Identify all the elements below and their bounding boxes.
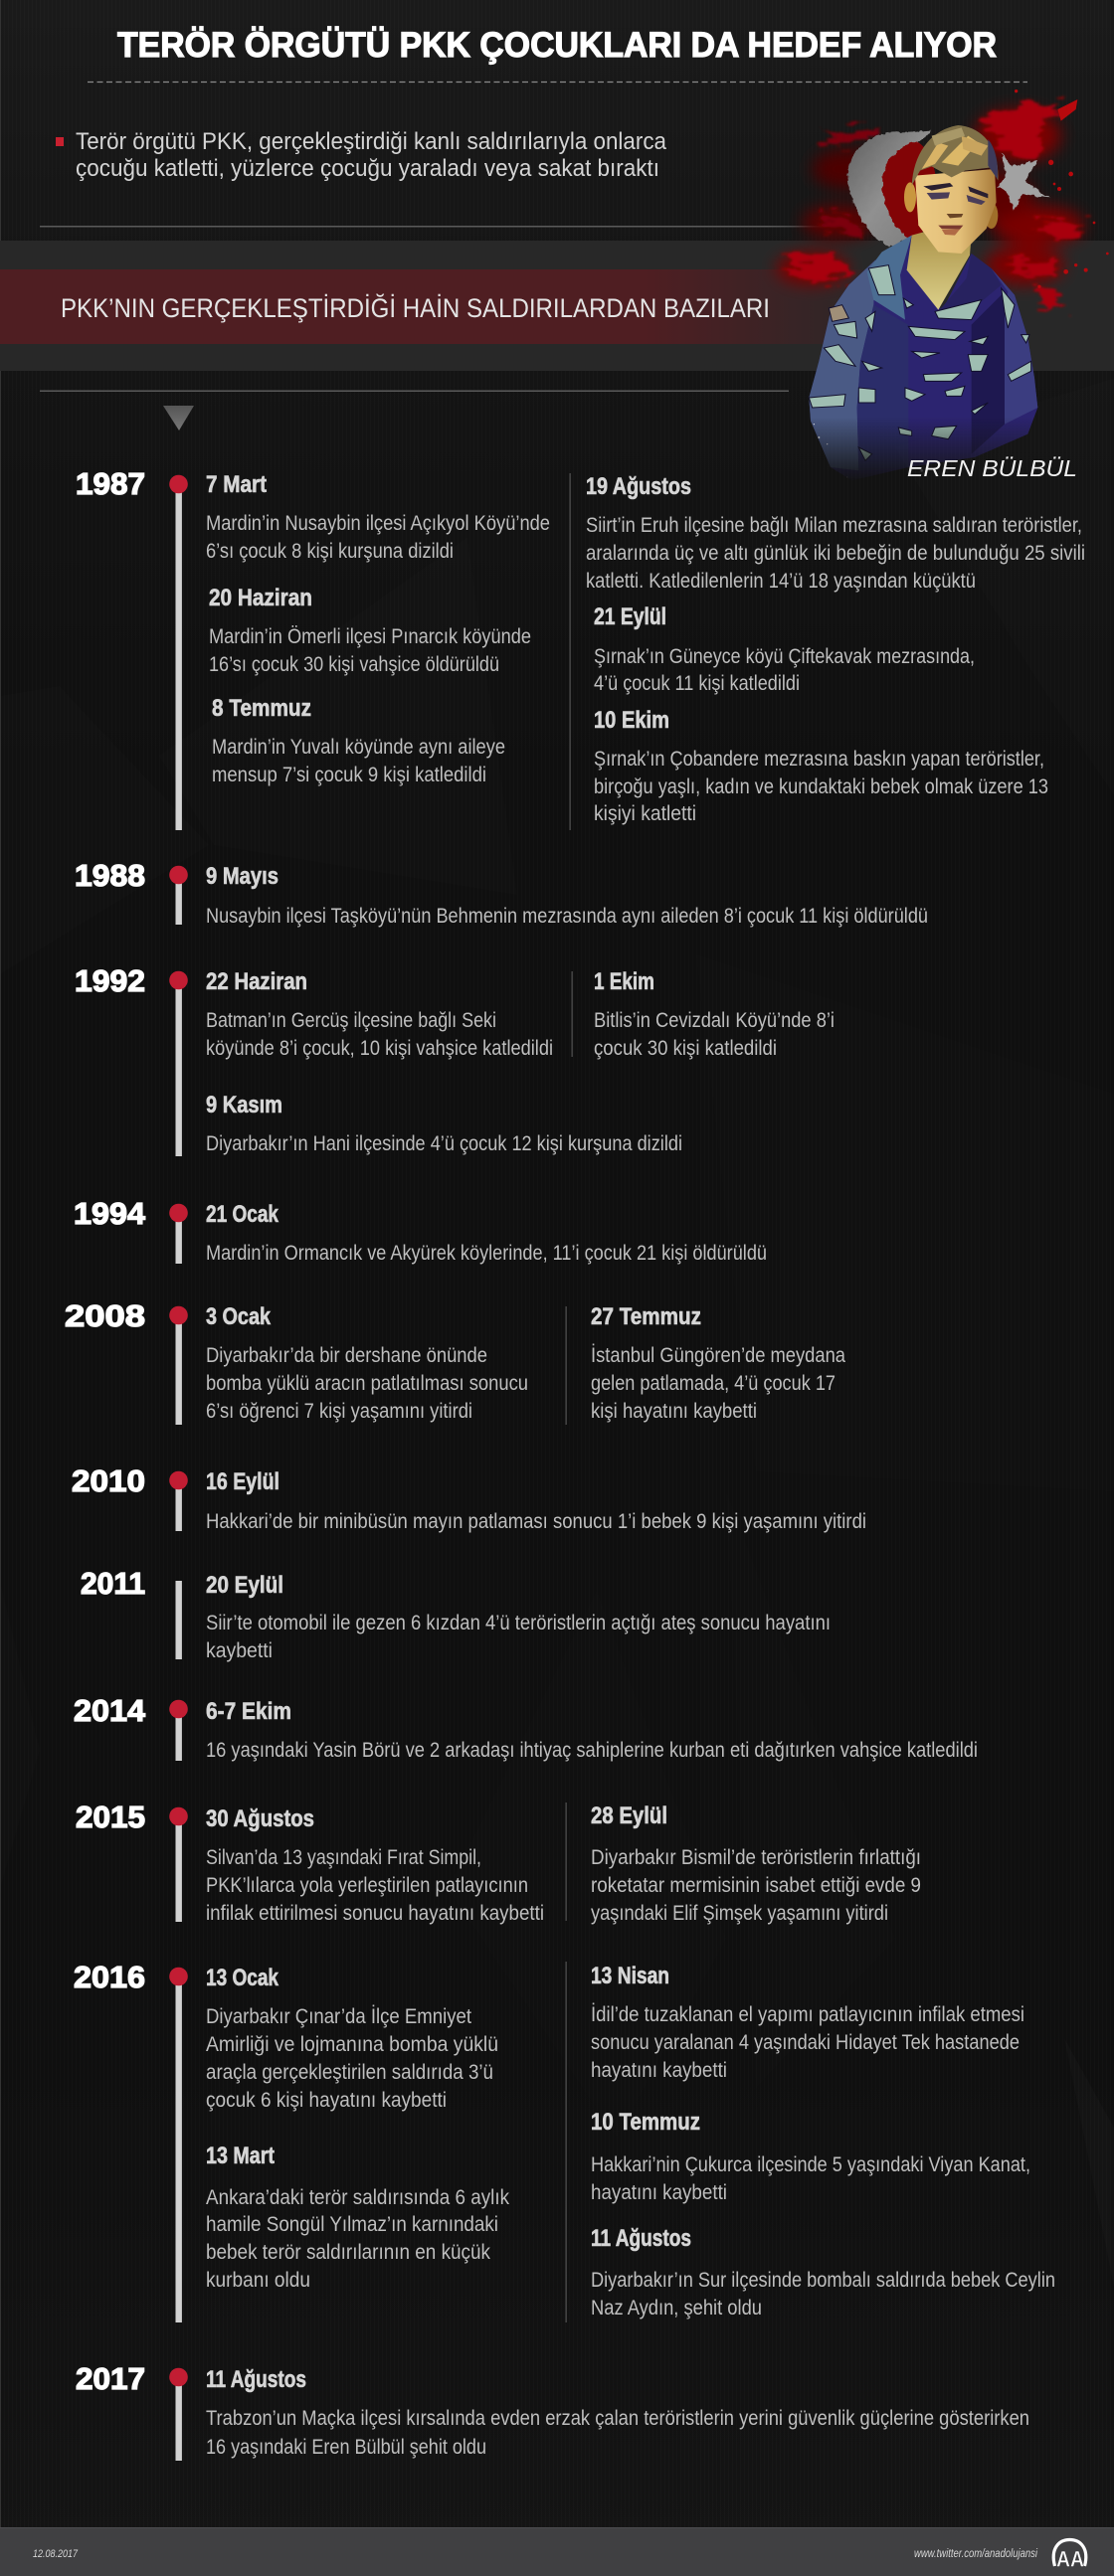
flag red smoke xyxy=(776,89,1109,308)
event: 13 Nisan: 13 Nisan xyxy=(591,1963,669,1989)
event: 9 Mayıs xyxy=(206,863,928,928)
year label: 2008 xyxy=(65,1298,145,1333)
year label: 1992 xyxy=(75,963,145,998)
event: 10 Ekim: kişiyi katletti xyxy=(594,801,696,825)
name: Eren Bülbül: EREN BÜLBÜL xyxy=(907,455,1077,481)
event: 28 Eylül xyxy=(591,1803,921,1925)
event: 28 Eylül: 28 Eylül xyxy=(591,1803,667,1829)
title: TERÖR ÖRGÜTÜ PKK ÇOCUKLARI DA HEDEF ALIYOR xyxy=(117,26,997,65)
event: 21 Eylül: 21 Eylül xyxy=(594,603,666,630)
timeline year 2014 xyxy=(74,1693,978,1762)
event: 8 Temmuz: 8 Temmuz xyxy=(212,695,311,722)
year label: 2010 xyxy=(72,1463,145,1498)
event: 11 Ağustos: Naz Aydın, şehit oldu xyxy=(591,2296,762,2319)
event: 16 Eylül: 16 Eylül xyxy=(206,1468,279,1495)
event: 8 Temmuz: Mardin’in Yuvalı köyünde aynı aileye xyxy=(212,735,505,759)
section band xyxy=(0,241,1114,371)
event: 3 Ocak: 6’sı öğrenci 7 kişi yaşamını yitirdi xyxy=(206,1399,472,1423)
timeline dot xyxy=(169,1471,188,1489)
event: 27 Temmuz: gelen patlamada, 4’ü çocuk 17 xyxy=(591,1371,836,1395)
event: 3 Ocak: 3 Ocak xyxy=(206,1303,272,1330)
hair xyxy=(912,125,998,186)
timeline stem xyxy=(175,980,182,1156)
event: 22 Haziran xyxy=(206,968,553,1060)
star xyxy=(998,153,1049,210)
timeline dot xyxy=(169,2368,188,2386)
event: 13 Mart: 13 Mart xyxy=(206,2143,275,2169)
event: 28 Eylül: Diyarbakır Bismil’de teröristlerin fırlattığı xyxy=(591,1845,921,1869)
dashed divider xyxy=(88,82,1027,84)
timeline stem xyxy=(175,875,182,925)
blood specks xyxy=(1015,89,1109,288)
event: 20 Haziran: 20 Haziran xyxy=(209,585,312,611)
event: 8 Temmuz xyxy=(212,695,505,786)
event: 11 Ağustos xyxy=(591,2225,1055,2319)
event: 3 Ocak: Diyarbakır’da bir dershane önünde xyxy=(206,1343,487,1367)
event: 13 Ocak: 13 Ocak xyxy=(206,1965,279,1991)
timeline year 2010 xyxy=(72,1463,866,1533)
event: 11 Ağustos: 11 Ağustos xyxy=(591,2225,691,2252)
event: 13 Nisan: hayatını kaybetti xyxy=(591,2058,727,2082)
event: 7 Mart: 6’sı çocuk 8 kişi kurşuna dizildi xyxy=(206,539,454,563)
source url: www.twitter.com/anadolujansi xyxy=(914,2546,1037,2560)
event: 11 Ağustos 2017: 16 yaşındaki Eren Bülbül şehit oldu xyxy=(206,2435,486,2459)
event: 11 Ağustos 2017: 11 Ağustos xyxy=(206,2366,306,2393)
event: 13 Ocak: çocuk 6 kişi hayatını kaybetti xyxy=(206,2088,447,2112)
event: 30 Ağustos: PKK’lılarca yola yerleştirilen patlayıcının xyxy=(206,1873,528,1897)
timeline year 2011 xyxy=(81,1566,831,1662)
timeline stem xyxy=(175,1315,182,1425)
event: 20 Haziran: Mardin’in Ömerli ilçesi Pınarcık köyünde xyxy=(209,624,531,648)
timeline dot xyxy=(169,1306,188,1324)
ears xyxy=(904,182,998,229)
event: 10 Temmuz: Hakkari’nin Çukurca ilçesinde 5 yaşındaki Viyan Kanat, xyxy=(591,2152,1030,2176)
event: 13 Mart: Ankara’daki terör saldırısında 6 aylık xyxy=(206,2185,509,2209)
timeline year 1994 xyxy=(74,1196,767,1265)
event: 9 Kasım xyxy=(206,1092,682,1155)
event: 30 Ağustos: 30 Ağustos xyxy=(206,1805,314,1832)
icon: Anadolu Agency logo xyxy=(1053,2539,1086,2571)
crescent xyxy=(847,131,932,247)
event: 16 Eylül: Hakkari’de bir minibüsün mayın patlaması sonucu 1’i bebek 9 kişi yaşamını yitirdi xyxy=(206,1509,866,1533)
event: 9 Kasım: 9 Kasım xyxy=(206,1092,282,1118)
timeline year 2008 xyxy=(65,1298,845,1425)
event: 13 Ocak: Amirliği ve lojmanına bomba yüklü xyxy=(206,2032,498,2056)
portrait: Eren Bülbül with Turkish flag xyxy=(776,89,1109,480)
year label: 1994 xyxy=(74,1196,146,1231)
event: 30 Ağustos: infilak ettirilmesi sonucu hayatını kaybetti xyxy=(206,1901,544,1925)
event: 28 Eylül: yaşındaki Elif Şimşek yaşamını yitirdi xyxy=(591,1901,888,1925)
event: 10 Temmuz xyxy=(591,2109,1030,2204)
timeline stem xyxy=(175,1816,182,1922)
date: 12.08.2017 xyxy=(33,2548,79,2560)
event: 20 Haziran xyxy=(209,585,531,676)
event: 9 Mayıs: 9 Mayıs xyxy=(206,863,278,890)
neck xyxy=(907,226,972,310)
event: 13 Mart: kurbanı oldu xyxy=(206,2268,310,2292)
event: 19 Ağustos: katletti. Katledilenlerin 14’ü 18 yaşından küçüktü xyxy=(586,569,976,593)
event: 13 Ocak: araçla gerçekleştirilen saldırıda 3’ü xyxy=(206,2060,493,2084)
event: 11 Ağustos 2017 xyxy=(206,2366,1029,2459)
timeline dot xyxy=(169,1807,188,1825)
event: 13 Mart: bebek terör saldırılarının en küçük xyxy=(206,2240,490,2264)
timeline stem xyxy=(175,484,182,830)
year label: 2011 xyxy=(81,1566,145,1601)
event: 20 Eylül xyxy=(206,1572,831,1662)
year label: 2015 xyxy=(76,1800,145,1834)
event: 7 Mart: Mardin’in Nusaybin ilçesi Açıkyol Köyü’nde xyxy=(206,511,550,535)
event: 27 Temmuz: kişi hayatını kaybetti xyxy=(591,1399,757,1423)
event: 27 Temmuz: İstanbul Güngören’de meydana xyxy=(591,1343,845,1367)
timeline stem xyxy=(175,1976,182,2322)
event: 10 Ekim: 10 Ekim xyxy=(594,707,669,734)
face xyxy=(915,169,997,254)
timeline dot xyxy=(169,866,188,884)
event: 30 Ağustos: Silvan’da 13 yaşındaki Fırat Simpil, xyxy=(206,1845,481,1869)
event: 8 Temmuz: mensup 7’si çocuk 9 kişi katledildi xyxy=(212,763,486,786)
event: 19 Ağustos xyxy=(586,473,1085,593)
timeline dot xyxy=(169,1700,188,1718)
event: 10 Ekim: Şırnak’ın Çobandere mezrasına baskın yapan teröristler, xyxy=(594,747,1044,771)
event: 10 Ekim xyxy=(594,707,1048,825)
collar xyxy=(867,236,912,320)
intro text block: Terör örgütü PKK, gerçekleştirdiği kanlı saldırılarıyla onlarca xyxy=(76,128,667,155)
timeline dot xyxy=(169,971,188,989)
red bullet xyxy=(56,137,64,146)
event: 20 Eylül: kaybetti xyxy=(206,1638,273,1662)
event: 7 Mart: 7 Mart xyxy=(206,471,267,498)
right sleeve xyxy=(992,268,1037,425)
event: 28 Eylül: roketatar mermisinin isabet ettiği evde 9 xyxy=(591,1873,921,1897)
timeline dot xyxy=(169,1968,188,1985)
timeline stem xyxy=(175,1709,182,1761)
timeline stem xyxy=(175,2377,182,2461)
flag red inside crescent xyxy=(880,139,937,239)
dissolving specks xyxy=(814,424,923,478)
event: 10 Temmuz: 10 Temmuz xyxy=(591,2109,700,2136)
timeline stem xyxy=(175,1480,182,1531)
footer xyxy=(0,2527,1114,2576)
section band: PKK’NIN GERÇEKLEŞTİRDİĞİ HAİN SALDIRILARDAN BAZILARI xyxy=(61,292,770,323)
event: 10 Temmuz: hayatını kaybetti xyxy=(591,2180,727,2204)
event: 21 Eylül: Şırnak’ın Güneyce köyü Çiftekavak mezrasında, xyxy=(594,644,975,668)
event: 13 Mart: hamile Songül Yılmaz’ın karnındaki xyxy=(206,2212,498,2236)
event: 16 Eylül xyxy=(206,1468,866,1533)
event: 13 Nisan xyxy=(591,1963,1024,2082)
event: 3 Ocak xyxy=(206,1303,528,1423)
timeline year 1992 xyxy=(75,963,835,1156)
year label: 1988 xyxy=(75,858,145,893)
event: 13 Ocak: Diyarbakır Çınar’da İlçe Emniyet xyxy=(206,2004,471,2028)
timeline dot xyxy=(169,475,188,493)
event: 22 Haziran: 22 Haziran xyxy=(206,968,307,995)
event: 20 Haziran: 16’sı çocuk 30 kişi vahşice öldürüldü xyxy=(209,652,499,676)
timeline stem xyxy=(175,1213,182,1264)
event: 1 Ekim: Bitlis’in Cevizdalı Köyü’nde 8’i xyxy=(594,1008,835,1032)
year label: 2014 xyxy=(74,1693,146,1728)
timeline year 1987 xyxy=(76,466,1085,830)
event: 6-7 Ekim xyxy=(206,1698,978,1762)
event: 21 Eylül xyxy=(594,603,975,695)
event: 30 Ağustos xyxy=(206,1805,544,1925)
event: 1 Ekim: 1 Ekim xyxy=(594,968,654,995)
event: 21 Eylül: 4’ü çocuk 11 kişi katledildi xyxy=(594,671,800,695)
event: 21 Ocak: Mardin’in Ormancık ve Akyürek köylerinde, 11’i çocuk 21 kişi öldürüldü xyxy=(206,1241,767,1265)
event: 1 Ekim: çocuk 30 kişi katledildi xyxy=(594,1036,777,1060)
left sleeve xyxy=(809,260,875,470)
timeline stem xyxy=(175,1581,182,1659)
facial features xyxy=(923,183,988,236)
event: 13 Nisan: sonucu yaralanan 4 yaşındaki Hidayet Tek hastanede xyxy=(591,2030,1020,2054)
year label: 1987 xyxy=(76,466,145,501)
timeline dot xyxy=(169,1204,188,1222)
event: 20 Eylül: 20 Eylül xyxy=(206,1572,283,1599)
jacket inner shadow xyxy=(857,305,908,431)
event: 22 Haziran: köyünde 8’i çocuk, 10 kişi vahşice katledildi xyxy=(206,1036,553,1060)
event: 9 Mayıs: Nusaybin ilçesi Taşköyü’nün Behmenin mezrasında aynı aileden 8’i çocuk 11 kişi öldürüldü xyxy=(206,904,928,928)
event: 13 Mart xyxy=(206,2143,509,2292)
event: 6-7 Ekim: 16 yaşındaki Yasin Börü ve 2 arkadaşı ihtiyaç sahiplerine kurban eti dağıtırken vahşice katledildi xyxy=(206,1738,978,1762)
event: 19 Ağustos: 19 Ağustos xyxy=(586,473,691,500)
timeline year 2016 xyxy=(74,1960,1055,2322)
intro text block xyxy=(56,128,667,182)
timeline year 1988 xyxy=(75,858,928,928)
event: 21 Ocak xyxy=(206,1201,767,1265)
arrow down xyxy=(163,406,194,430)
year label: 2017 xyxy=(76,2361,145,2396)
event: 27 Temmuz: 27 Temmuz xyxy=(591,1303,701,1330)
event: 22 Haziran: Batman’ın Gercüş ilçesine bağlı Seki xyxy=(206,1008,496,1032)
event: 3 Ocak: bomba yüklü aracın patlatılması sonucu xyxy=(206,1371,528,1395)
event: 27 Temmuz xyxy=(591,1303,845,1423)
event: 13 Nisan: İdil’de tuzaklanan el yapımı patlayıcının infilak etmesi xyxy=(591,2002,1024,2026)
event: 13 Ocak xyxy=(206,1965,498,2112)
icon: Anadolu Agency logo: AA xyxy=(1056,2547,1084,2571)
event: 1 Ekim xyxy=(594,968,835,1060)
event: 21 Ocak: 21 Ocak xyxy=(206,1201,279,1228)
camouflage patches xyxy=(809,265,1031,460)
jacket xyxy=(809,236,1037,480)
timeline year 2015 xyxy=(76,1800,921,1925)
year label: 2016 xyxy=(74,1960,145,1994)
event: 9 Kasım: Diyarbakır’ın Hani ilçesinde 4’ü çocuk 12 kişi kurşuna dizildi xyxy=(206,1131,682,1155)
event: 6-7 Ekim: 6-7 Ekim xyxy=(206,1698,291,1725)
event: 7 Mart xyxy=(206,471,550,563)
event: 20 Eylül: Siir’te otomobil ile gezen 6 kızdan 4’ü teröristlerin açtığı ateş sonucu hayatını xyxy=(206,1611,831,1634)
intro text block: çocuğu katletti, yüzlerce çocuğu yaraladı veya sakat bıraktı xyxy=(76,155,659,182)
timeline year 2017 xyxy=(76,2361,1029,2461)
